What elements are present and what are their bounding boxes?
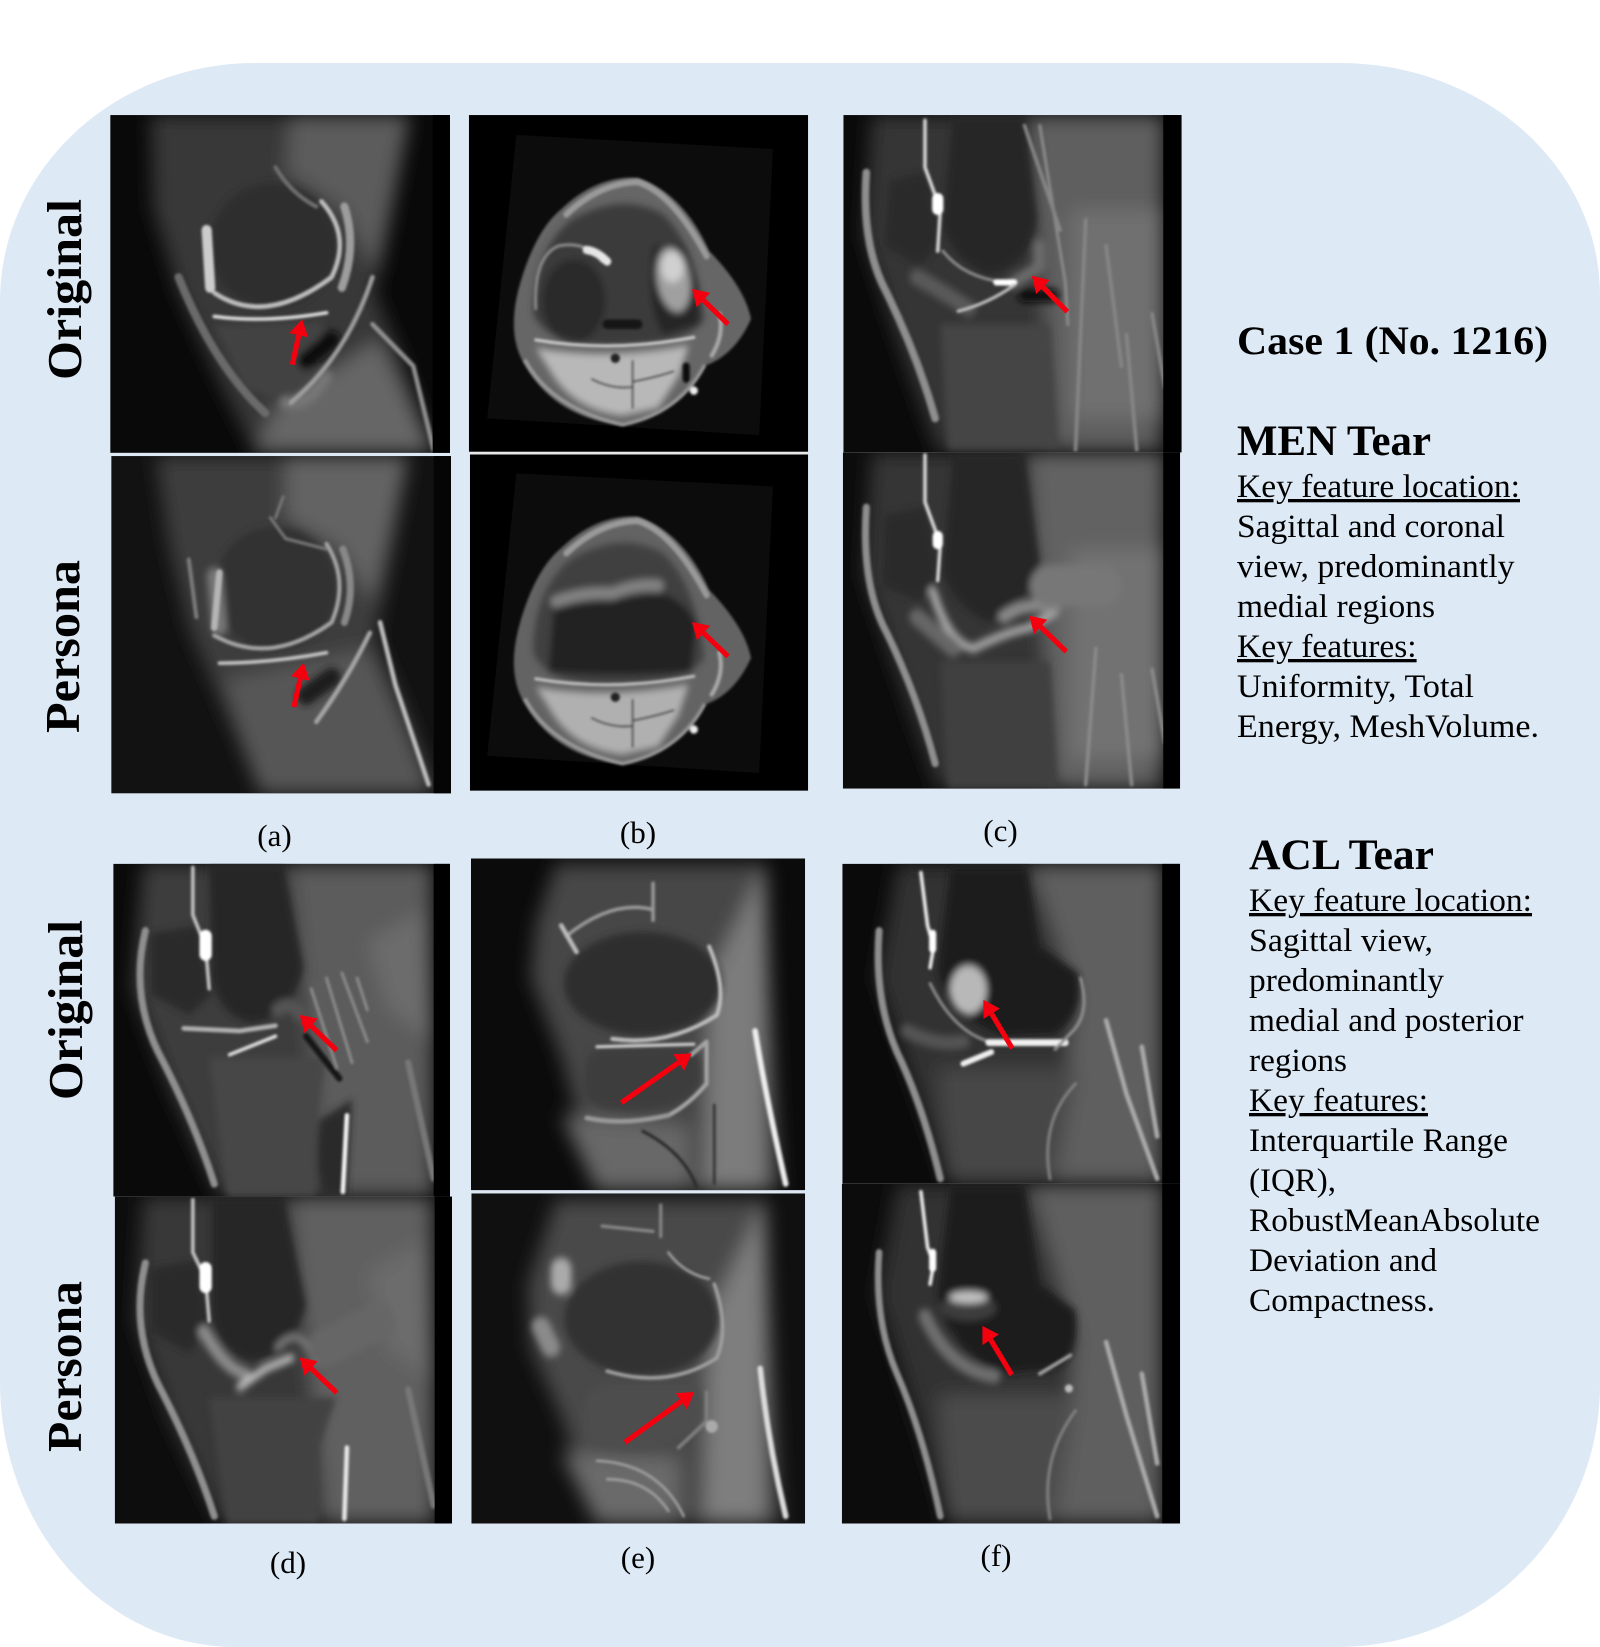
text block: MEN tear <box>1237 418 1539 745</box>
arrow a persona <box>294 679 300 707</box>
image e: original <box>471 859 805 1193</box>
image c: persona <box>843 452 1180 789</box>
MEN key feature location label: Key feature location: <box>1237 469 1520 505</box>
ACL key feature location label: Key feature location: <box>1249 883 1532 919</box>
caption c: (c) <box>983 813 1018 848</box>
ACL location description: medial and posterior <box>1249 1003 1524 1039</box>
case title: Case 1 (No. 1216) <box>1237 318 1548 363</box>
arrow b persona <box>704 633 728 656</box>
heading: MEN Tear: MEN Tear <box>1237 418 1431 465</box>
ACL location description: predominantly <box>1249 963 1444 999</box>
ACL features list: Compactness. <box>1249 1283 1435 1319</box>
arrows row 2 left <box>311 1026 681 1442</box>
ACL features list: Deviation and <box>1249 1243 1438 1279</box>
row label: persona bottom: Persona <box>37 1281 92 1452</box>
row label: original top: Original <box>37 199 92 380</box>
text block: ACL tear <box>1249 832 1540 1319</box>
caption d: (d) <box>270 1545 306 1580</box>
image b: original <box>469 115 808 452</box>
image b: persona <box>470 454 808 791</box>
arrow d original <box>311 1026 337 1050</box>
ACL features list: (IQR), <box>1249 1163 1336 1199</box>
ACL features list: RobustMeanAbsolute <box>1249 1203 1540 1239</box>
image e: persona <box>471 1193 805 1524</box>
image a: persona <box>111 456 451 793</box>
row 1 images <box>110 115 808 793</box>
arrow e persona <box>625 1401 681 1442</box>
arrow f original <box>992 1014 1012 1048</box>
arrow c persona <box>1041 627 1066 652</box>
arrow f persona <box>991 1340 1012 1375</box>
image c: original <box>843 115 1182 452</box>
row label: persona top: Persona <box>35 560 90 733</box>
arrows row 2 right <box>991 1014 1012 1375</box>
MEN key features label: Key features: <box>1237 629 1417 665</box>
arrow d persona <box>311 1368 337 1393</box>
arrow b original <box>703 300 728 324</box>
caption a: (a) <box>257 818 292 853</box>
ACL key features label: Key features: <box>1249 1083 1428 1119</box>
image d: original <box>113 864 450 1197</box>
caption b: (b) <box>620 815 656 850</box>
ACL location description: regions <box>1249 1043 1347 1079</box>
image a: original <box>110 115 450 453</box>
MEN features list: Uniformity, Total <box>1237 669 1474 705</box>
row label: original bottom: Original <box>38 920 93 1100</box>
MEN features list: Energy, MeshVolume. <box>1237 709 1539 745</box>
MEN location description: medial regions <box>1237 589 1435 625</box>
image f: persona <box>842 1184 1180 1524</box>
arrows row 1 right <box>1041 287 1067 652</box>
MEN location description <box>1237 509 1515 625</box>
image d: persona <box>115 1197 452 1524</box>
MEN features list <box>1237 669 1539 745</box>
arrow c original <box>1043 287 1067 312</box>
image f: original <box>842 864 1180 1184</box>
caption f: (f) <box>981 1538 1011 1573</box>
ACL features list <box>1249 1123 1540 1319</box>
ACL features list: Interquartile Range <box>1249 1123 1508 1159</box>
MEN location description: view, predominantly <box>1237 549 1515 585</box>
caption e: (e) <box>621 1540 655 1575</box>
arrow a original <box>292 335 299 365</box>
arrows row 1 left <box>292 300 728 707</box>
MEN location description: Sagittal and coronal <box>1237 509 1505 545</box>
ACL location description: Sagittal view, <box>1249 923 1433 959</box>
ACL location description <box>1249 923 1524 1079</box>
arrow e original <box>621 1062 679 1103</box>
heading: ACL Tear: ACL Tear <box>1249 832 1434 879</box>
